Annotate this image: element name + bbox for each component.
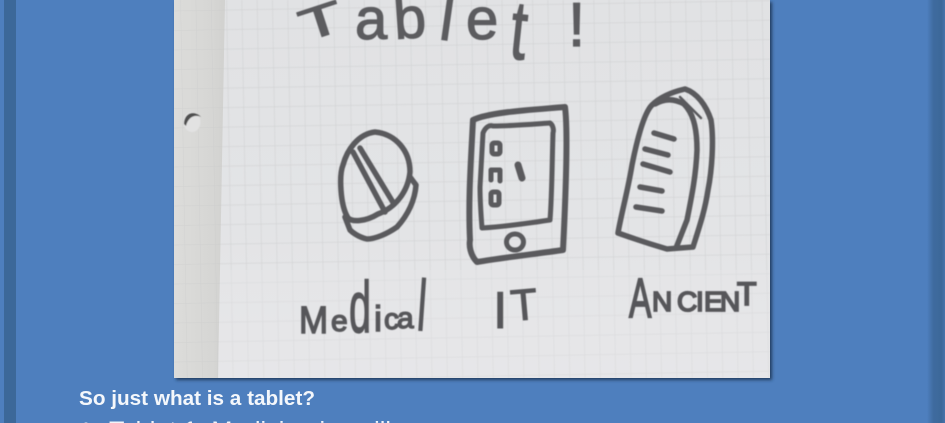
label: Ancient: A — [629, 266, 652, 329]
punched hole — [184, 112, 201, 132]
label: Medical: M — [299, 299, 328, 341]
text: question heading: So just what is a tablet? — [79, 388, 315, 410]
label: IT — [496, 287, 537, 330]
handwritten title — [296, 0, 581, 62]
photo: hand drawn tablets on grid paper — [174, 0, 770, 378]
graph paper — [174, 0, 770, 378]
label: Medical: e — [331, 305, 348, 338]
label: Medical — [300, 276, 427, 334]
label: Ancient — [628, 277, 758, 319]
icon: medical pill — [341, 132, 416, 239]
photo shadow — [176, 2, 772, 380]
icon: IT tablet device — [469, 107, 566, 262]
app icons — [491, 143, 500, 205]
label: Medical: l — [415, 266, 429, 347]
label: IT: T — [509, 280, 540, 331]
label: Ancient: T — [737, 276, 757, 312]
paper margin strip — [174, 0, 225, 378]
label: Medical: d — [349, 268, 371, 348]
label: IT: I — [493, 282, 507, 340]
icon: ancient stone tablet — [618, 89, 712, 249]
label: Medical: a — [397, 302, 414, 335]
bullet — [82, 422, 90, 423]
label: Ancient: NCIEN — [652, 286, 740, 317]
label: Medical: c — [384, 303, 399, 336]
label: Medical: i — [374, 298, 382, 339]
